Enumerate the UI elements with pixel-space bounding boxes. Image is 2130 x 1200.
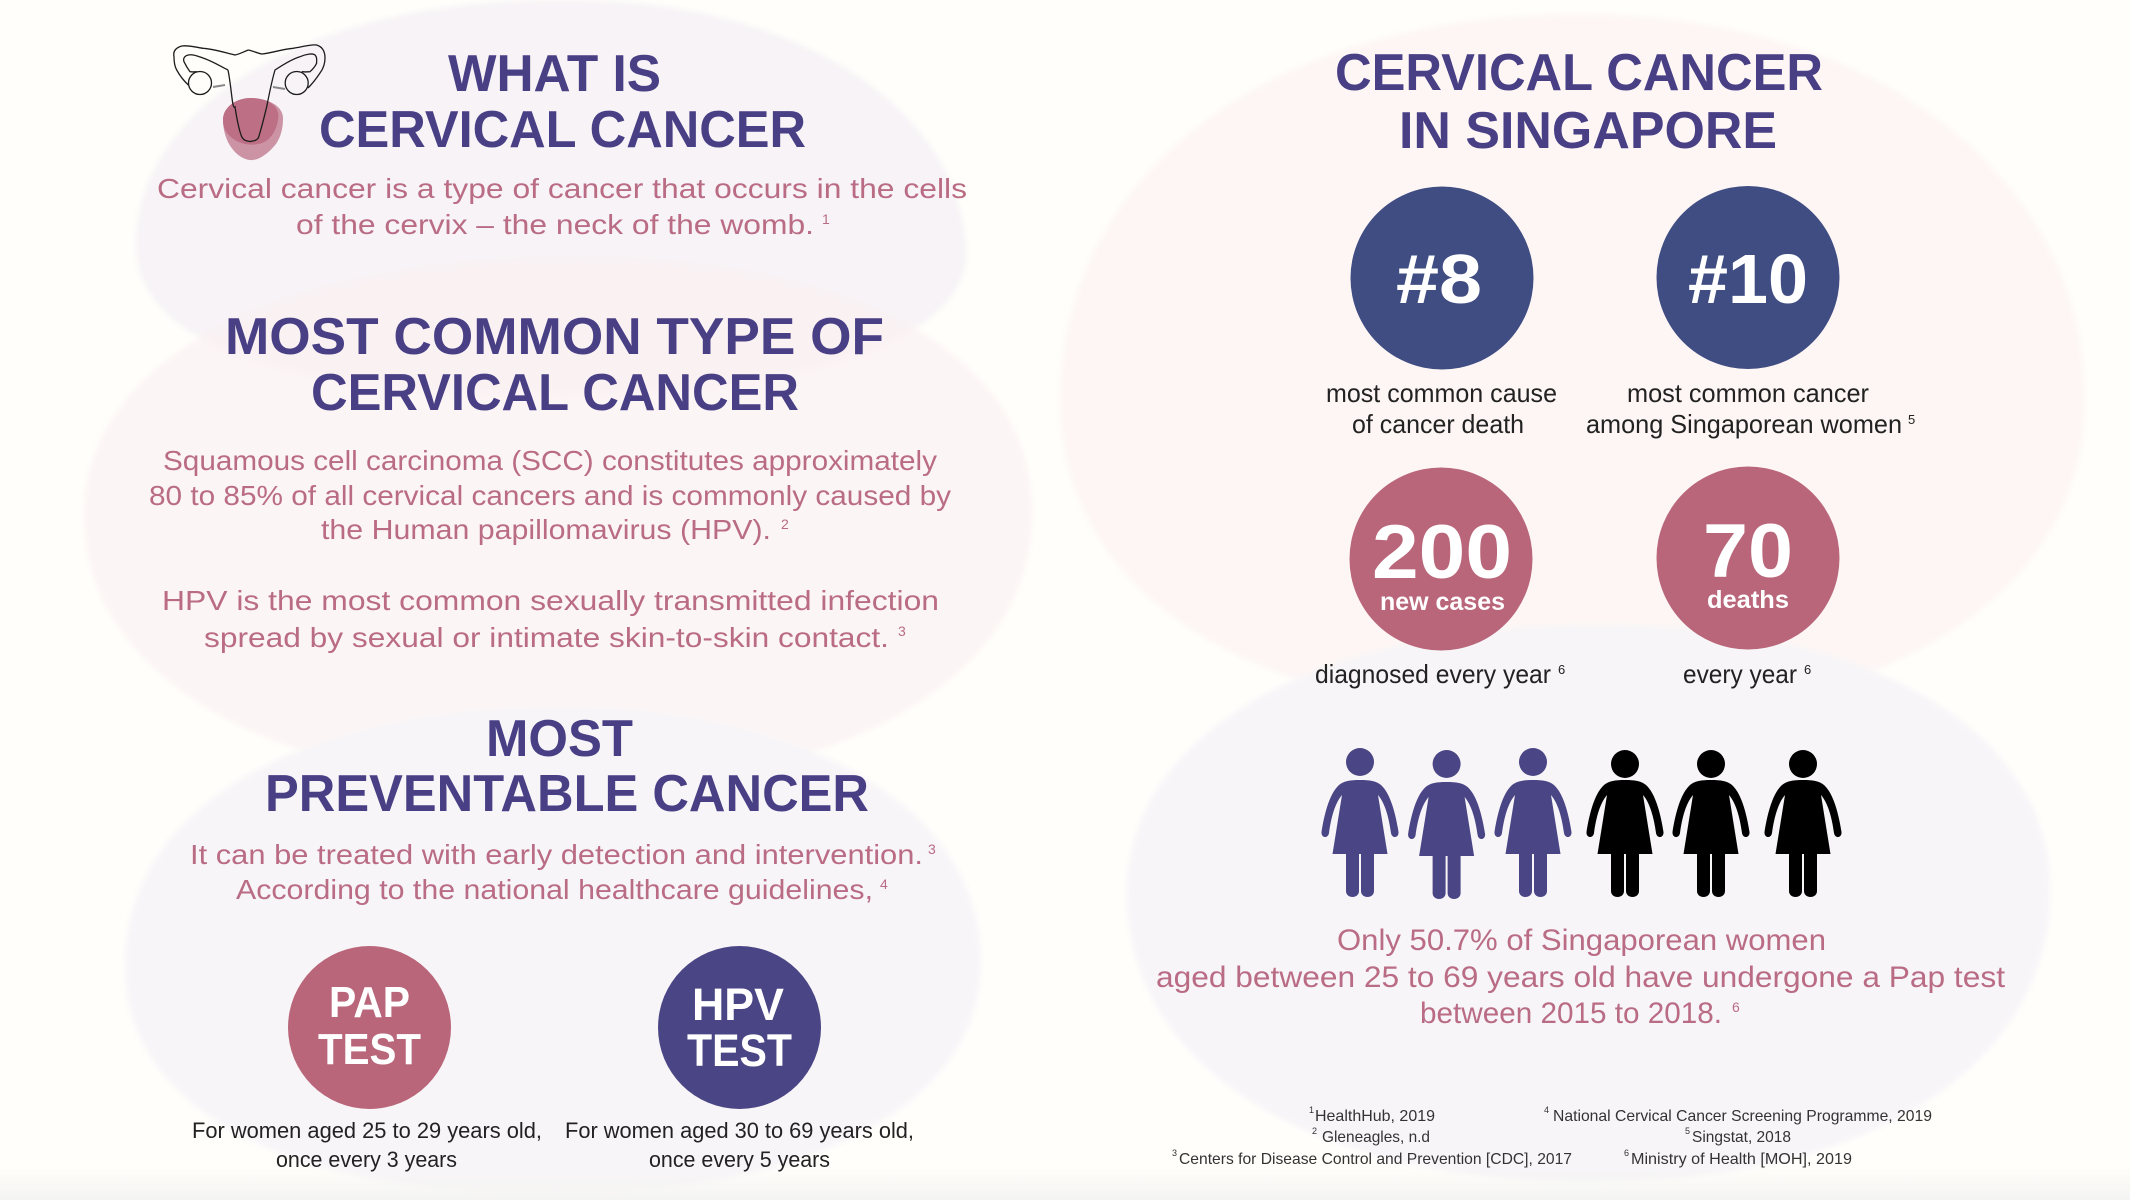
heading: most common type bbox=[225, 308, 884, 422]
stat label: number 8: of cancer death bbox=[1352, 409, 1524, 439]
badge: pap test: TEST bbox=[318, 1025, 421, 1074]
heading: most common type: MOST COMMON TYPE OF bbox=[225, 308, 884, 366]
references: 6 bbox=[1624, 1148, 1629, 1158]
stat: 200 new cases: new cases bbox=[1380, 588, 1505, 616]
bottom fade bbox=[0, 1165, 2130, 1200]
background blob: bottom left bbox=[125, 706, 981, 1195]
stat: number 10 bbox=[1656, 186, 1840, 369]
references: Gleneagles, n.d bbox=[1322, 1129, 1430, 1146]
heading: cervical cancer in singapore bbox=[1335, 44, 1823, 160]
stat label: number 10: most common cancer bbox=[1627, 378, 1869, 408]
badge: pap test bbox=[288, 946, 451, 1109]
references: 2 bbox=[1312, 1126, 1317, 1136]
text: hpv explanation bbox=[162, 585, 939, 653]
background blob: bottom right bbox=[1127, 625, 2050, 1182]
text: prevention: According to the national healthcare guidelines, bbox=[236, 874, 873, 905]
stat: 200 new cases: 200 bbox=[1372, 510, 1512, 595]
icon: uterus bbox=[174, 45, 325, 160]
references: National Cervical Cancer Screening Programme, 2019 bbox=[1553, 1108, 1932, 1125]
stat label: 70 deaths: every year bbox=[1683, 659, 1797, 689]
heading: most preventable cancer: MOST bbox=[486, 710, 633, 768]
text: squamous cell carcinoma: the Human papillomavirus (HPV). bbox=[321, 514, 771, 545]
stat: number 8: #8 bbox=[1396, 240, 1482, 318]
stat: 70 deaths bbox=[1656, 466, 1840, 650]
stat: 70 deaths: 70 bbox=[1703, 509, 1793, 594]
heading: most preventable cancer bbox=[265, 710, 869, 823]
caption: hpv test: For women aged 30 to 69 years old, bbox=[565, 1118, 914, 1143]
text: squamous cell carcinoma: Squamous cell carcinoma (SCC) constitutes approximately bbox=[163, 445, 937, 476]
references: 5 bbox=[1685, 1126, 1690, 1136]
stat: number 10: #10 bbox=[1688, 240, 1808, 318]
text: prevention bbox=[190, 839, 936, 905]
text: hpv explanation: spread by sexual or intimate skin-to-skin contact. bbox=[204, 622, 889, 653]
background blob: top left bbox=[136, 0, 966, 395]
text: pap test statistic: Only 50.7% of Singaporean women bbox=[1337, 924, 1826, 957]
heading: what is cervical cancer: WHAT IS bbox=[448, 45, 661, 103]
text: pap test statistic: 6 bbox=[1732, 999, 1740, 1015]
references: Singstat, 2018 bbox=[1692, 1129, 1791, 1146]
stat label: 200 new cases: diagnosed every year bbox=[1315, 659, 1551, 689]
stat label: number 10 bbox=[1586, 378, 1915, 439]
badge: hpv test: TEST bbox=[687, 1025, 792, 1076]
caption: pap test: For women aged 25 to 29 years old, bbox=[192, 1118, 542, 1143]
caption: pap test: once every 3 years bbox=[276, 1147, 457, 1172]
text: prevention: 3 bbox=[928, 841, 936, 857]
badge: hpv test: HPV bbox=[692, 979, 784, 1030]
stat label: 200 new cases: 6 bbox=[1558, 662, 1565, 677]
text: definition: 1 bbox=[822, 211, 830, 227]
text: prevention: It can be treated with early detection and intervention. bbox=[190, 839, 923, 870]
stat label: number 10: 5 bbox=[1908, 412, 1915, 427]
stat: 70 deaths: deaths bbox=[1707, 586, 1789, 614]
heading: cervical cancer in singapore: IN SINGAPORE bbox=[1399, 102, 1777, 160]
references: Centers for Disease Control and Prevention [CDC], 2017 bbox=[1179, 1151, 1572, 1168]
text: squamous cell carcinoma: 2 bbox=[781, 516, 789, 532]
stat label: number 8: most common cause bbox=[1326, 378, 1557, 408]
references bbox=[1172, 1105, 1932, 1168]
text: pap test statistic: between 2015 to 2018. bbox=[1420, 997, 1722, 1030]
text: definition: of the cervix – the neck of the womb. bbox=[296, 209, 814, 240]
stat: number 8 bbox=[1350, 186, 1534, 370]
stat label: 70 deaths: 6 bbox=[1804, 662, 1811, 677]
heading: what is cervical cancer bbox=[319, 45, 806, 159]
heading: cervical cancer in singapore: CERVICAL CANCER bbox=[1335, 44, 1823, 102]
references: 1 bbox=[1309, 1105, 1314, 1115]
heading: most common type: CERVICAL CANCER bbox=[311, 364, 799, 422]
stat label: number 10: among Singaporean women bbox=[1586, 409, 1902, 439]
text: squamous cell carcinoma bbox=[149, 445, 951, 545]
references: 4 bbox=[1544, 1105, 1549, 1115]
references: 3 bbox=[1172, 1148, 1177, 1158]
background blob: middle left bbox=[84, 258, 1032, 788]
stat label: number 8 bbox=[1326, 378, 1557, 439]
caption: hpv test bbox=[565, 1118, 914, 1172]
text: hpv explanation: 3 bbox=[898, 623, 906, 639]
references: HealthHub, 2019 bbox=[1315, 1108, 1435, 1125]
badge: pap test: PAP bbox=[329, 978, 410, 1027]
stat: 200 new cases bbox=[1350, 468, 1532, 650]
caption: pap test bbox=[192, 1118, 542, 1172]
heading: most preventable cancer: PREVENTABLE CANCER bbox=[265, 765, 869, 823]
text: hpv explanation: HPV is the most common sexually transmitted infection bbox=[162, 585, 939, 616]
text: pap test statistic: aged between 25 to 69 years old have undergone a Pap test bbox=[1156, 961, 2006, 994]
references: Ministry of Health [MOH], 2019 bbox=[1631, 1151, 1852, 1168]
text: definition bbox=[157, 173, 967, 240]
text: pap test statistic bbox=[1156, 924, 2006, 1030]
caption: hpv test: once every 5 years bbox=[649, 1147, 830, 1172]
pictogram: six women bbox=[1321, 748, 1842, 899]
background blob: top right bbox=[1060, 14, 2085, 720]
heading: what is cervical cancer: CERVICAL CANCER bbox=[319, 101, 806, 159]
badge: hpv test bbox=[658, 946, 821, 1109]
text: prevention: 4 bbox=[880, 876, 888, 892]
text: definition: Cervical cancer is a type of cancer that occurs in the cells bbox=[157, 173, 967, 204]
text: squamous cell carcinoma: 80 to 85% of all cervical cancers and is commonly caused by bbox=[149, 480, 951, 511]
